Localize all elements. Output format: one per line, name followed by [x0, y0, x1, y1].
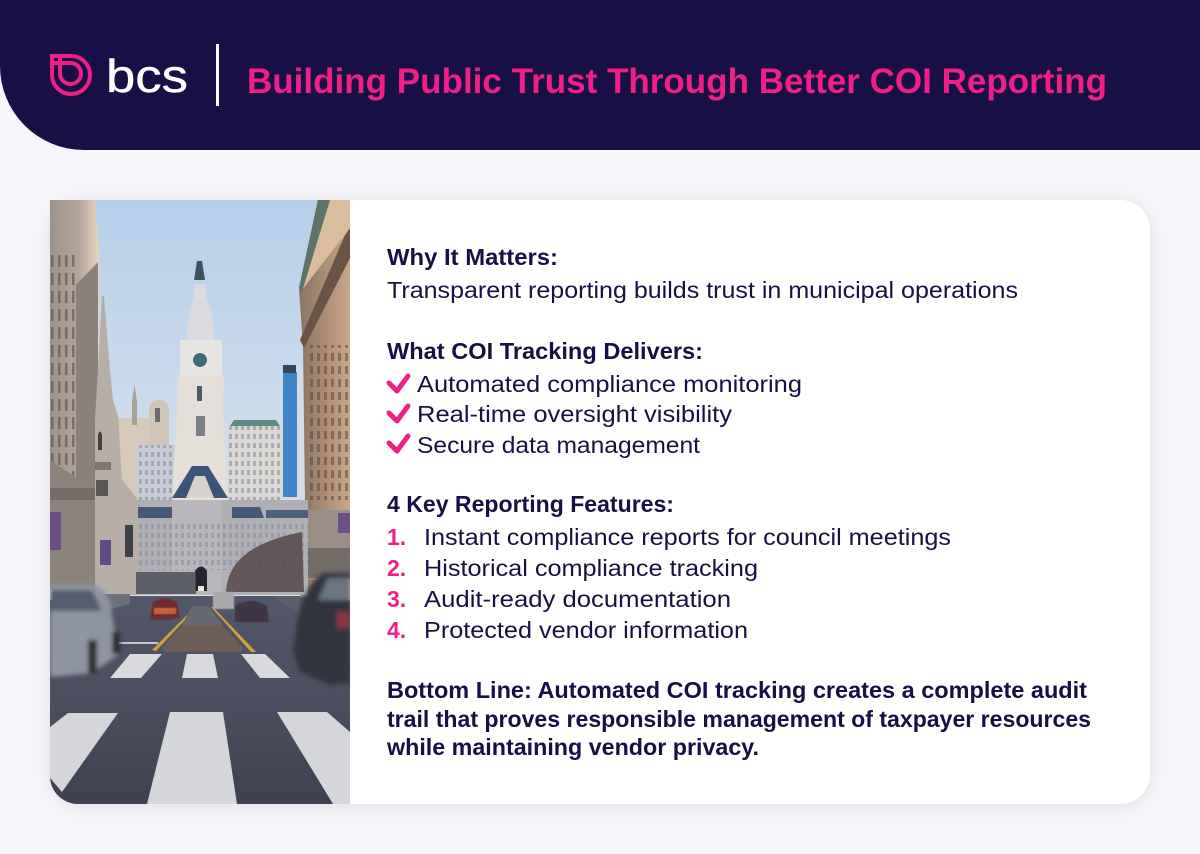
- cars: [50, 573, 350, 685]
- bottom line: trail that proves responsible management of taxpayer resources: [387, 706, 1091, 732]
- card background: [50, 200, 1150, 804]
- gothic steeple: [95, 296, 138, 595]
- feature 4: Protected vendor information: [424, 617, 748, 643]
- near crosswalk row 1: [110, 654, 290, 678]
- blurred car left: [50, 585, 120, 677]
- section: why it matters: [387, 244, 1018, 303]
- city hall facade: [136, 500, 308, 595]
- banners: [50, 512, 350, 565]
- header banner: [0, 0, 1200, 150]
- check item 3: Secure data management: [417, 432, 700, 458]
- near crosswalk row 2: [50, 712, 350, 804]
- right building: [299, 200, 350, 600]
- logo: bcs: [52, 50, 188, 102]
- city hall tower: [172, 261, 228, 500]
- distant buildings: [117, 365, 307, 508]
- check item 2: Real-time oversight visibility: [417, 401, 732, 427]
- icon: bcs mark: [52, 56, 90, 94]
- feature 4: 4.: [387, 617, 406, 643]
- left buildings: [50, 200, 99, 590]
- blurred car right: [293, 573, 350, 685]
- feature 1: 1.: [387, 524, 406, 550]
- bottom line: while maintaining vendor privacy.: [386, 734, 759, 760]
- road: [50, 596, 350, 804]
- title: Building Public Trust Through Better COI Reporting: [247, 62, 1107, 101]
- heading: 4 Key Reporting Features:: [387, 491, 674, 517]
- header divider: [216, 44, 219, 106]
- feature 3: 3.: [387, 586, 406, 612]
- heading: Why It Matters:: [387, 244, 558, 270]
- panel: content card: [50, 200, 1150, 804]
- feature 2: 2.: [387, 555, 406, 581]
- feature 3: Audit-ready documentation: [424, 586, 731, 612]
- section: 4 key reporting features: [387, 491, 951, 643]
- wordmark: bcs: [106, 50, 188, 102]
- check item 1: Automated compliance monitoring: [417, 371, 802, 397]
- heading: What COI Tracking Delivers:: [387, 338, 703, 364]
- photo: city hall street: [50, 200, 350, 804]
- bottom line: [386, 677, 1091, 760]
- section: what COI tracking delivers: [387, 338, 802, 458]
- body: Transparent reporting builds trust in municipal operations: [387, 277, 1018, 303]
- bottom line: Bottom Line: Automated COI tracking creates a complete audit: [387, 677, 1087, 703]
- median: [118, 606, 256, 652]
- sidewalk hints: [102, 594, 130, 609]
- feature 1: Instant compliance reports for council meetings: [424, 524, 951, 550]
- feature 2: Historical compliance tracking: [424, 555, 758, 581]
